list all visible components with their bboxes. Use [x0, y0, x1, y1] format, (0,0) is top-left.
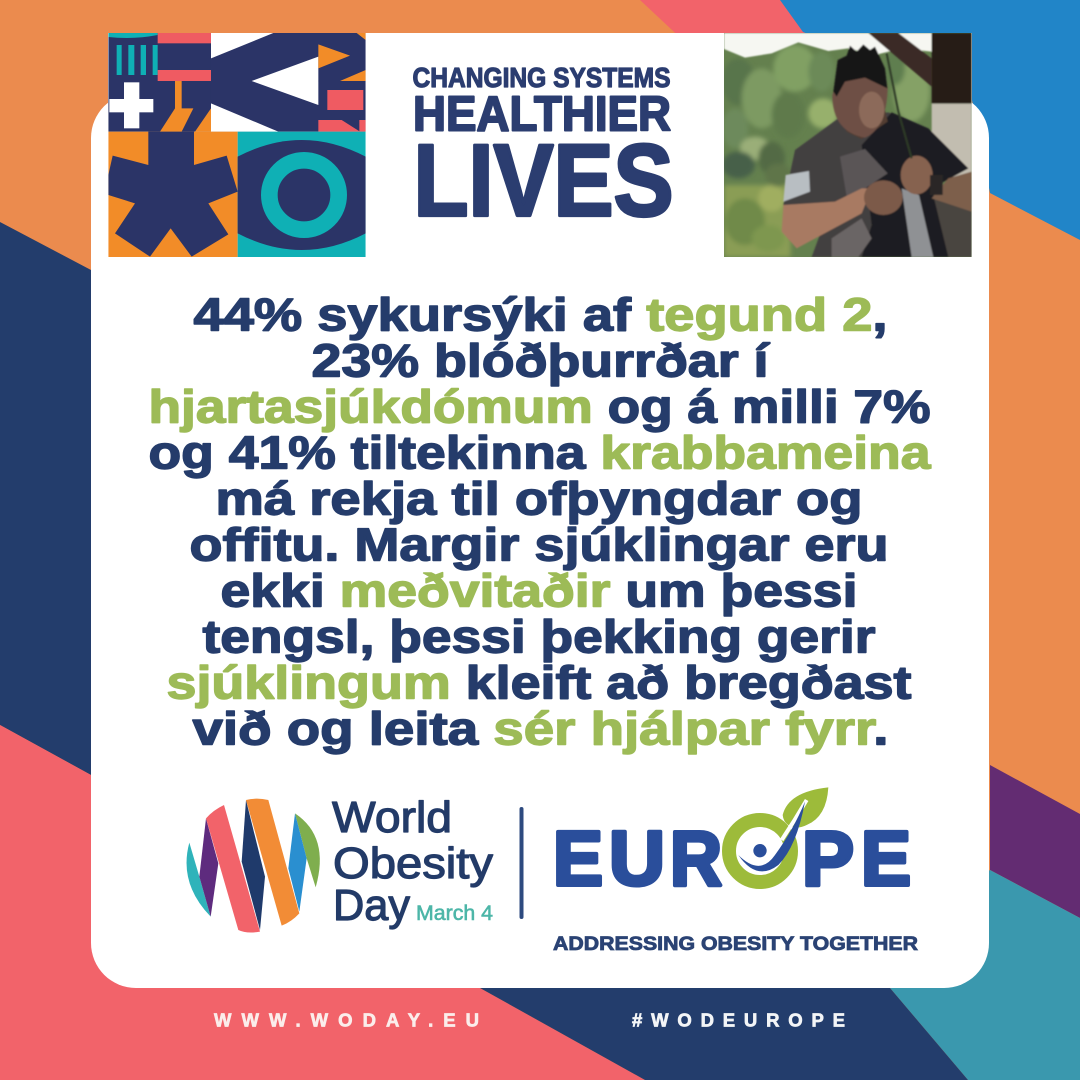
heading: campaign title — [412, 62, 674, 238]
text block: main statement: 44% sykursýki af tegund 2 , — [194, 288, 888, 340]
logo letters: P — [802, 816, 854, 902]
logo letters: E — [861, 816, 911, 902]
panel: header strip — [108, 33, 972, 257]
logo wordmark: Obesity — [333, 839, 493, 888]
text block: main statement: má rekja til ofþyngdar og — [216, 472, 862, 524]
text block: main statement: 23% blóðþurrðar í — [312, 334, 771, 386]
logo letters: E — [553, 816, 603, 902]
logo wordmark — [332, 793, 493, 930]
logo wordmark: Day — [333, 881, 410, 930]
logo wordmark: World — [332, 793, 452, 842]
text block: main statement: tengsl, þessi þekking gerir — [202, 610, 876, 662]
divider between logos — [520, 807, 524, 919]
text block: main statement: offitu. Margir sjúklingar eru — [190, 518, 888, 570]
logo: World Obesity Day — [187, 793, 493, 933]
logo: Europe — [553, 787, 918, 955]
icon: leaf ring with figure — [729, 787, 828, 882]
text block: main statement: við og leita sér hjálpar fyrr . — [192, 702, 888, 754]
icon: ribbon globe — [187, 799, 320, 933]
date label: March 4 — [416, 902, 493, 925]
text block: main statement: sjúklingum kleift að bregðast — [166, 656, 912, 708]
heading: campaign title: CHANGING SYSTEMS — [412, 62, 670, 93]
footer: hashtag: #WODEUROPE — [632, 1010, 845, 1030]
heading: campaign title: HEALTHIER — [413, 88, 671, 142]
footer: website: WWW.WODAY.EU — [214, 1010, 479, 1030]
logo letters: R — [670, 816, 722, 902]
photo: man with fishing gear — [722, 33, 972, 257]
panel: white card — [91, 93, 989, 988]
text block: main statement: hjartasjúkdómum og á milli 7% — [148, 380, 930, 432]
heading: campaign title: LIVES — [414, 124, 674, 238]
tagline: ADDRESSING OBESITY TOGETHER — [553, 934, 918, 955]
logo letters — [553, 816, 911, 902]
text block: main statement: ekki meðvitaðir um þessi — [220, 564, 858, 616]
text block: main statement — [148, 288, 931, 754]
text block: main statement: og 41% tiltekinna krabbameina — [148, 426, 931, 478]
icon: campaign pattern tiles — [108, 33, 366, 257]
logo letters: U — [609, 816, 665, 902]
